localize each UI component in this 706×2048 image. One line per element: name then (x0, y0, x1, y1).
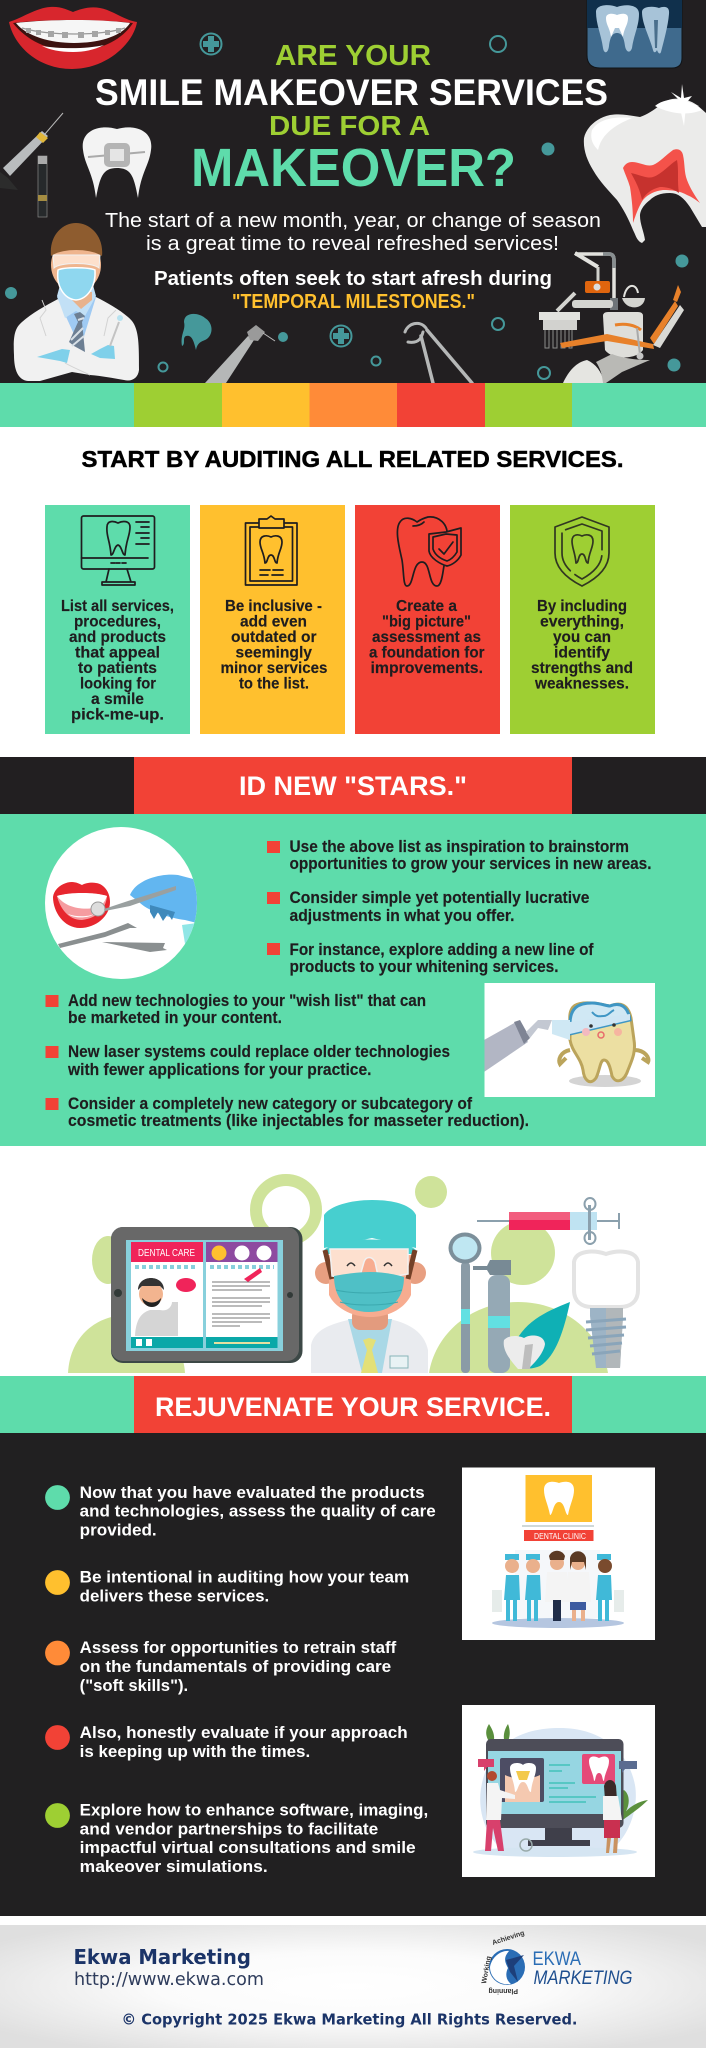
item: now that you have evaluated: provided. (80, 1522, 157, 1540)
card text: add even (240, 614, 307, 630)
card: be inclusive (200, 505, 345, 734)
card text: List all services, (61, 598, 174, 615)
card text: a foundation for (369, 644, 484, 662)
card text (61, 598, 174, 724)
logo: ekwa marketing: EKWA (532, 1949, 581, 1970)
panel: dental care illustration (68, 1174, 640, 1373)
bullet list: top: opportunities to grow your services in new areas. (290, 855, 652, 873)
card text: pick-me-up. (71, 706, 164, 724)
card text: procedures, (74, 614, 161, 630)
logo: ekwa marketing: Planning (488, 1987, 518, 1994)
card text: identify (554, 644, 610, 662)
card text: strengths and (531, 660, 633, 677)
item: explore how to enhance: Explore how to enhance software, imaging, (80, 1802, 428, 1820)
icon: shield with tooth (555, 517, 609, 586)
item: now that you have evaluated: and technologies, assess the quality of care (80, 1503, 436, 1521)
card text: Be inclusive - (225, 598, 322, 615)
card text: to patients (78, 660, 157, 677)
illustration: tablet: DENTAL CARE (138, 1248, 195, 1259)
illustration: tablet (111, 1227, 302, 1363)
bullet list: top: For instance, explore adding a new line of (290, 941, 594, 959)
icon: clipboard with tooth (246, 516, 297, 585)
illustration: dentist (311, 1200, 428, 1373)
title: MAKEOVER? (191, 138, 516, 198)
temporal milestones text: "TEMPORAL MILESTONES." (232, 291, 475, 313)
item: be intentional (45, 1568, 409, 1606)
illustration: handpiece (473, 1260, 511, 1373)
heading: start by auditing: START BY AUDITING ALL RELATED SERVICES. (82, 446, 624, 472)
logo: ekwa marketing: Achieving (491, 1930, 525, 1947)
bullet list: top: Use the above list as inspiration to brainstorm (290, 838, 629, 856)
card text: a smile (91, 691, 144, 708)
card text (220, 598, 328, 692)
card text: you can (553, 629, 611, 646)
title: DUE FOR A (269, 110, 430, 141)
icon: tooth with shield (397, 517, 461, 586)
footer brand name: Ekwa Marketing (74, 1945, 251, 1969)
card text (531, 598, 633, 692)
card text (369, 598, 484, 677)
temporal milestones text (154, 268, 552, 313)
illustration: dental clinic team (462, 1468, 655, 1640)
illustration: leaf and tooth (504, 1302, 570, 1369)
icon: dentist with arms crossed (14, 223, 139, 381)
icon: dental x-ray (587, 0, 682, 68)
item: now that you have evaluated (45, 1484, 436, 1540)
card: list all services (45, 505, 190, 734)
panel: audit section (0, 427, 706, 757)
icon: smile with braces (9, 7, 137, 69)
card text: to the list. (239, 676, 309, 692)
icon: shining molar (584, 84, 706, 243)
card text: everything, (540, 614, 624, 630)
intro text (105, 210, 601, 255)
item: be intentional: delivers these services. (80, 1588, 269, 1606)
illustration: dental exam oval (45, 827, 197, 979)
item: now that you have evaluated: Now that you have evaluated the products (80, 1484, 425, 1502)
item: explore how to enhance (45, 1802, 428, 1876)
colour strip (0, 383, 706, 427)
bullet list: bottom (46, 992, 529, 1130)
bullet list: bottom: New laser systems could replace older technologies (68, 1043, 450, 1061)
icon: dental handpiece (205, 325, 275, 383)
banner: rejuvenate your service: REJUVENATE YOUR SERVICE. (155, 1392, 551, 1422)
bullet list: top: Consider simple yet potentially lucrative (290, 889, 590, 907)
panel: rejuvenate (0, 1433, 706, 1916)
bullet list: bottom: cosmetic treatments (like injectables for masseter reduction). (68, 1112, 529, 1130)
bullet list: bottom: be marketed in your content. (68, 1009, 282, 1027)
illustration: dental mirror (448, 1232, 482, 1373)
icon: dental forceps (405, 323, 472, 383)
card text: seemingly (236, 644, 312, 662)
intro text: is a great time to reveal refreshed services! (146, 233, 559, 255)
banner: id new stars (0, 757, 706, 814)
copyright: © Copyright 2025 Ekwa Marketing All Rights Reserved. (122, 2010, 578, 2028)
item: honestly evaluate: is keeping up with the times. (80, 1743, 310, 1761)
footer url: http://www.ekwa.com (74, 1969, 264, 1990)
icon: tooth with bracket (83, 127, 151, 198)
card text: that appeal (75, 644, 160, 662)
item: honestly evaluate (45, 1724, 408, 1761)
item: be intentional: Be intentional in auditing how your team (80, 1568, 409, 1586)
logo: ekwa marketing: Working (481, 1956, 493, 1984)
icon: dental chair (539, 253, 684, 383)
bullet list: bottom: Consider a completely new category or subcategory of (68, 1095, 472, 1113)
card text: weaknesses. (534, 676, 629, 692)
illustration: syringe (477, 1198, 619, 1244)
card text: looking for (80, 676, 156, 692)
card: strengths and weaknesses (510, 505, 655, 734)
card text: By including (537, 598, 627, 615)
card text: assessment as (372, 629, 481, 646)
bullet list: bottom: Add new technologies to your "wish list" that can (68, 992, 426, 1010)
item: assess for opportunities: Assess for opportunities to retrain staff (80, 1639, 397, 1657)
illustration: virtual consultation (462, 1705, 655, 1877)
card text: Create a (396, 598, 457, 615)
card text: outdated or (231, 629, 316, 646)
title: SMILE MAKEOVER SERVICES (95, 72, 608, 113)
bullet list: top: adjustments in what you offer. (290, 907, 514, 925)
title: ARE YOUR (275, 40, 431, 72)
card text: minor services (220, 660, 328, 677)
panel: header (0, 0, 706, 383)
card text: "big picture" (382, 614, 471, 630)
bullet list: top (267, 838, 652, 976)
item: honestly evaluate: Also, honestly evaluate if your approach (80, 1724, 408, 1742)
panel: footer (0, 1916, 706, 2048)
panel: id new stars (0, 814, 706, 1146)
item: explore how to enhance: and vendor partnerships to facilitate (80, 1820, 378, 1838)
card text: improvements. (370, 660, 483, 677)
illustration: tooth whitening (484, 983, 655, 1097)
decorative teal dots and rings (5, 34, 688, 379)
logo: ekwa marketing: MARKETING (534, 1968, 632, 1989)
card: big picture (355, 505, 500, 734)
icon: monitor with tooth (82, 516, 154, 585)
bullet list: top: products to your whitening services. (290, 958, 558, 976)
item: explore how to enhance: impactful virtual consultations and smile (80, 1839, 416, 1857)
bullet list: bottom: with fewer applications for your practice. (67, 1061, 372, 1079)
item: assess for opportunities: on the fundamentals of providing care (80, 1658, 391, 1676)
intro text: The start of a new month, year, or change of season (105, 210, 601, 232)
banner: rejuvenate your service (0, 1376, 706, 1433)
illustration: dental clinic team: DENTAL CLINIC (534, 1531, 586, 1541)
logo: ekwa marketing (481, 1930, 632, 1994)
banner: id new stars: ID NEW "STARS." (239, 771, 467, 801)
icon: teal tooth (182, 314, 212, 350)
decorative green shapes (68, 1176, 608, 1373)
item: assess for opportunities: ("soft skills"). (80, 1677, 188, 1695)
temporal milestones text: Patients often seek to start afresh during (154, 268, 552, 290)
item: explore how to enhance: makeover simulations. (80, 1858, 268, 1876)
title (95, 40, 608, 198)
item: assess for opportunities (45, 1639, 397, 1695)
card text: and products (69, 629, 166, 646)
icon: syringe and cartridge (0, 113, 63, 217)
illustration: dental implant (574, 1252, 638, 1368)
